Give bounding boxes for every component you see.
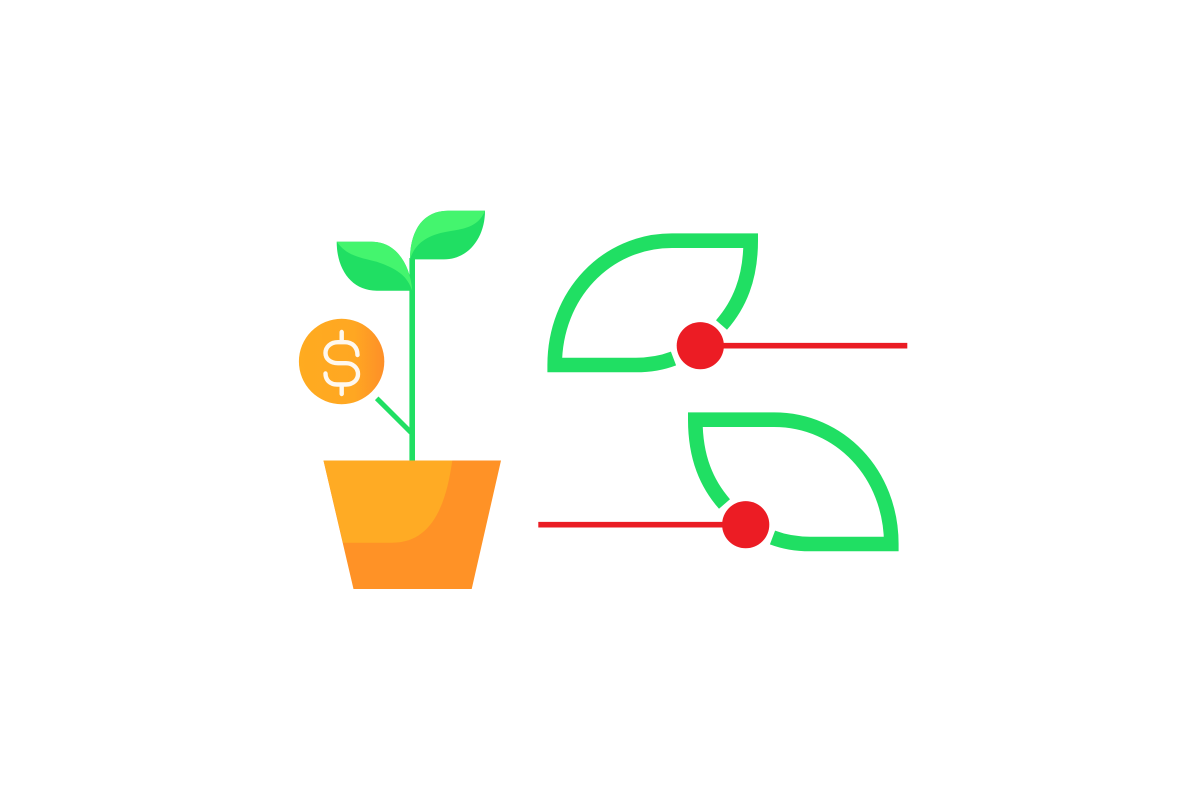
plant stem xyxy=(409,258,415,461)
upper red line xyxy=(722,343,907,349)
icon: lower leaf outline with red node xyxy=(538,420,891,548)
lower red line xyxy=(538,522,724,528)
icon: dollar coin xyxy=(299,319,384,404)
right leaf xyxy=(410,211,485,259)
dollar sign xyxy=(326,332,358,394)
icon: upper leaf outline with red node xyxy=(555,241,907,369)
coin branch xyxy=(377,398,411,432)
left leaf xyxy=(337,242,412,291)
lower leaf outline xyxy=(695,420,891,544)
lower red node xyxy=(722,501,769,548)
upper red node xyxy=(677,322,724,369)
icon: potted plant with coin xyxy=(299,211,501,589)
pot xyxy=(324,460,501,589)
upper leaf outline xyxy=(555,241,751,365)
